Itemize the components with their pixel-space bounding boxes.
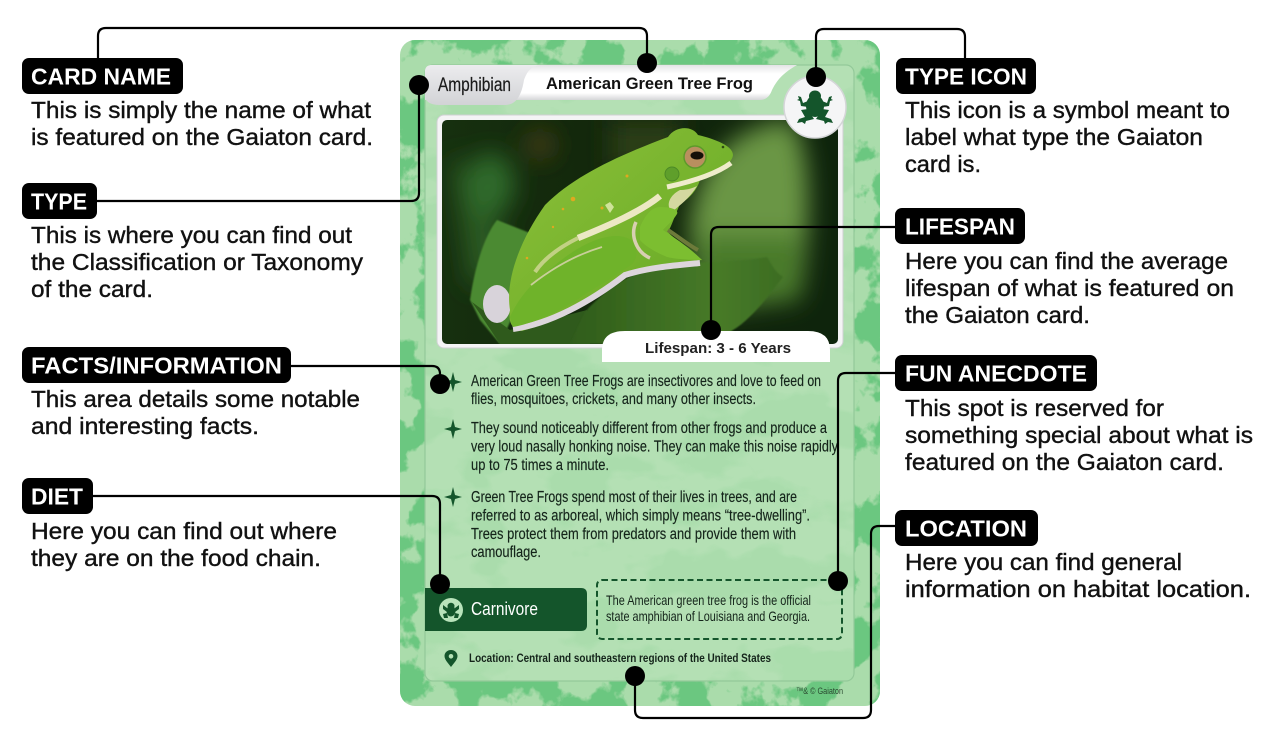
photo: green tree frog	[442, 120, 838, 344]
lifespan pill	[602, 331, 830, 362]
fact 1: American Green Tree Frogs are insectivores and love to feed on	[471, 373, 821, 390]
type label: Amphibian	[438, 75, 511, 96]
frog figure	[483, 128, 733, 331]
callout: facts/information: and interesting facts.	[31, 413, 259, 439]
callout: diet: they are on the food chain.	[31, 545, 321, 571]
card inner panel	[425, 65, 854, 681]
callout: card name	[22, 58, 373, 150]
type icon	[784, 76, 846, 138]
type tab	[425, 65, 540, 105]
fact 1: flies, mosquitoes, crickets, and many other insects.	[471, 391, 756, 408]
connector: diet	[93, 496, 450, 594]
callout: location	[895, 510, 1251, 602]
lifespan pill: Lifespan: 3 - 6 Years	[645, 340, 791, 357]
callout: type: of the card.	[31, 276, 153, 302]
callout: type: This is where you can find out	[31, 222, 352, 248]
copyright: ™& © Gaiaton	[796, 686, 843, 697]
callout: fun anecdote: featured on the Gaiaton card.	[905, 449, 1224, 475]
fun anecdote box	[597, 580, 842, 639]
callout: diet: DIET	[31, 484, 84, 510]
callout: location: Here you can find general	[905, 549, 1182, 575]
location row: Location: Central and southeastern regions of the United States	[469, 651, 771, 665]
connector: card name	[98, 28, 657, 73]
fun anecdote box: The American green tree frog is the official	[606, 592, 811, 608]
callout: fun anecdote: something special about what is	[905, 422, 1253, 448]
connector: type	[97, 75, 429, 201]
card name text: American Green Tree Frog	[546, 74, 753, 93]
callout: type icon: This icon is a symbol meant to	[905, 97, 1230, 123]
callout: facts/information: This area details some notable	[31, 386, 360, 412]
callout: lifespan	[895, 208, 1234, 328]
fact 2: very loud nasally honking noise. They can make this noise rapidly	[471, 438, 838, 456]
callout: lifespan: LIFESPAN	[905, 214, 1015, 240]
connector: facts	[291, 366, 450, 394]
callout: type: the Classification or Taxonomy	[31, 249, 363, 275]
callout: card name: This is simply the name of what	[31, 97, 371, 123]
icon: small frog	[443, 603, 459, 618]
fact 2: up to 75 times a minute.	[471, 457, 609, 474]
callout: card name: CARD NAME	[31, 64, 171, 90]
card name banner	[425, 65, 797, 100]
callout: fun anecdote: FUN ANECDOTE	[905, 360, 1087, 386]
callout: fun anecdote	[895, 355, 1253, 475]
callout: type	[22, 183, 363, 302]
callout: diet: Here you can find out where	[31, 518, 337, 544]
callout: facts/information	[22, 347, 360, 439]
fact 2	[444, 419, 838, 474]
connector: fun anecdote	[828, 373, 895, 591]
icon: map pin	[444, 650, 458, 667]
callout: diet	[22, 478, 337, 571]
callout: location: LOCATION	[905, 516, 1027, 542]
callout: type icon	[896, 58, 1230, 177]
callout: type icon: card is.	[905, 151, 981, 177]
fact 2: They sound noticeably different from other frogs and produce a	[471, 420, 827, 437]
card background	[400, 40, 880, 706]
callout: lifespan: Here you can find the average	[905, 248, 1228, 274]
callout: type: TYPE	[31, 188, 87, 214]
callout: card name: is featured on the Gaiaton card.	[31, 124, 373, 150]
fun anecdote box: state amphibian of Louisiana and Georgia.	[606, 608, 810, 624]
fact 3: referred to as arboreal, which simply means “tree-dwelling”.	[471, 508, 810, 524]
fact 3	[444, 487, 810, 561]
callout: facts/information: FACTS/INFORMATION	[31, 352, 282, 378]
fact 3: Trees protect them from predators and provide them with	[471, 526, 796, 543]
fact 3: camouflage.	[471, 544, 541, 561]
location row	[444, 650, 771, 667]
fact 3: Green Tree Frogs spend most of their lives in trees, and are	[471, 489, 797, 506]
diet bar: Carnivore	[471, 599, 538, 619]
panel outline	[425, 65, 854, 681]
diet bar	[425, 588, 587, 631]
callout: type icon: label what type the Gaiaton	[905, 124, 1203, 150]
photo frame	[437, 115, 843, 348]
callout: fun anecdote: This spot is reserved for	[905, 395, 1164, 421]
fact 1	[444, 372, 821, 408]
callout: lifespan: the Gaiaton card.	[905, 302, 1090, 328]
connector: type icon	[806, 29, 965, 87]
connector: location	[625, 526, 895, 718]
callout: lifespan: lifespan of what is featured on	[905, 275, 1234, 301]
fact list	[444, 372, 838, 561]
icon: frog	[797, 90, 833, 124]
header bar	[425, 65, 797, 105]
callout: location: information on habitat location.	[905, 576, 1251, 602]
connector: lifespan	[701, 227, 895, 340]
callout: type icon: TYPE ICON	[905, 64, 1027, 90]
